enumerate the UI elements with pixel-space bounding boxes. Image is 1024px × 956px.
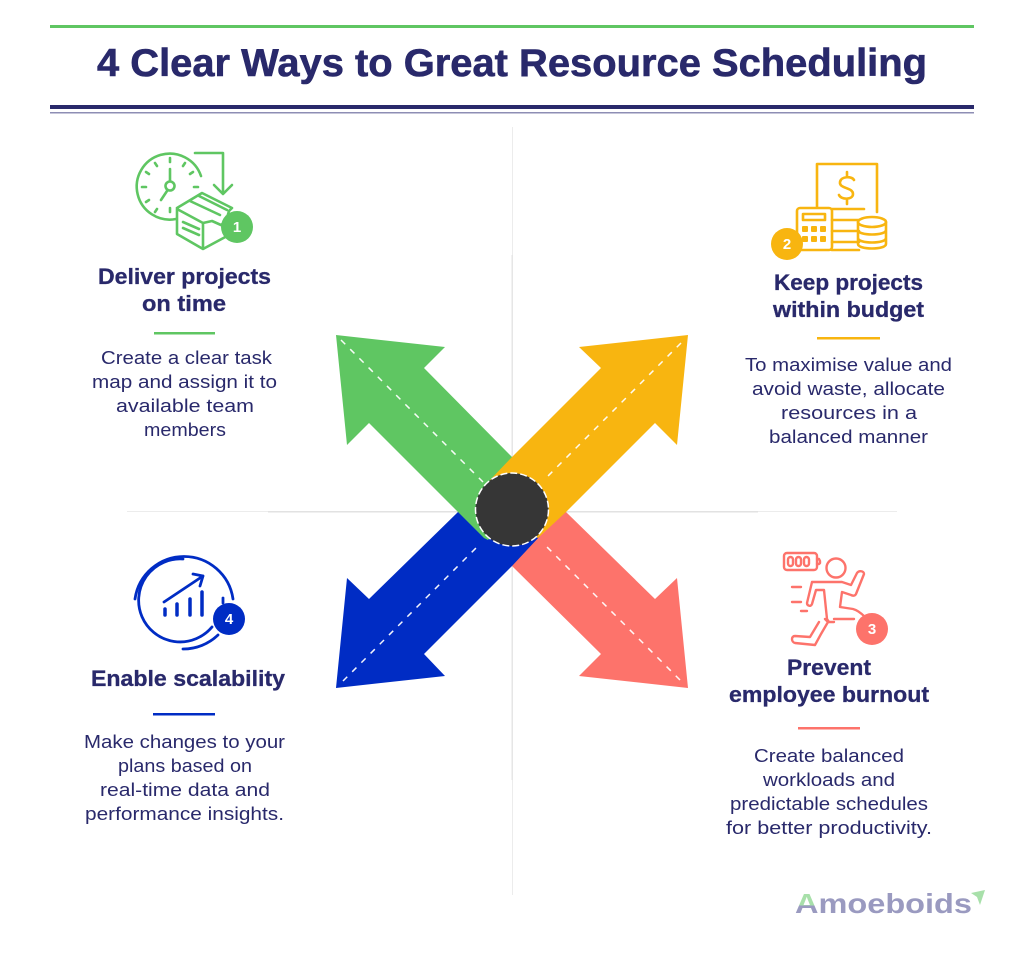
header rules and title xyxy=(50,25,974,114)
body text: workloads and xyxy=(762,769,895,790)
panel 1: deliver projects on time xyxy=(92,153,277,440)
title: 4 Clear Ways to Great Resource Scheduling xyxy=(97,42,927,85)
arrow: blue, bottom left xyxy=(336,505,540,688)
panel 3: prevent employee burnout: 3 xyxy=(868,621,876,638)
body text: map and assign it to xyxy=(92,371,277,392)
body text: balanced manner xyxy=(769,426,928,447)
heading: on time xyxy=(142,291,226,316)
body text: resources in a xyxy=(781,402,918,423)
body text: Create balanced xyxy=(754,745,904,766)
badge 4 xyxy=(213,603,245,635)
logo: Amoeboids: Amoeboids xyxy=(795,888,972,919)
heading: employee burnout xyxy=(729,682,930,707)
body text: members xyxy=(144,419,226,440)
body text: To maximise value and xyxy=(745,354,952,375)
heading: Keep projects xyxy=(774,270,923,295)
dashed arrow centre lines xyxy=(341,340,681,681)
icon: running figure with battery xyxy=(784,553,888,645)
badge 3 xyxy=(856,613,888,645)
arrow: orange, top right xyxy=(490,335,688,538)
centre circle xyxy=(476,473,548,546)
body text: Make changes to your xyxy=(84,731,285,752)
icon: growth chart in circle xyxy=(135,557,245,649)
body text: for better productivity. xyxy=(726,817,932,838)
icon: clock and parcel xyxy=(137,153,253,249)
body text: performance insights. xyxy=(85,803,284,824)
heading: Deliver projects xyxy=(98,264,271,289)
body text: avoid waste, allocate xyxy=(752,378,945,399)
central arrows diagram xyxy=(336,335,688,688)
arrow: green, top left xyxy=(336,335,530,540)
panel 2: keep projects within budget xyxy=(745,164,952,447)
panel 4: enable scalability xyxy=(84,557,286,824)
heading: Prevent xyxy=(787,655,872,680)
body text: real-time data and xyxy=(100,779,270,800)
arrow: red, bottom right xyxy=(480,512,688,688)
icon: budget document, calculator and coins xyxy=(771,164,886,260)
badge 2 xyxy=(771,228,803,260)
panel 3: prevent employee burnout xyxy=(726,553,932,838)
heading: Enable scalability xyxy=(91,666,286,691)
panel 1: deliver projects on time: 1 xyxy=(233,219,241,236)
panel 4: enable scalability: 4 xyxy=(225,611,234,628)
body text: plans based on xyxy=(118,755,252,776)
heading: within budget xyxy=(772,297,925,322)
body text: predictable schedules xyxy=(730,793,928,814)
body text: available team xyxy=(116,395,254,416)
panel 2: keep projects within budget: 2 xyxy=(783,236,791,253)
body text: Create a clear task xyxy=(101,347,273,368)
badge 1 xyxy=(221,211,253,243)
